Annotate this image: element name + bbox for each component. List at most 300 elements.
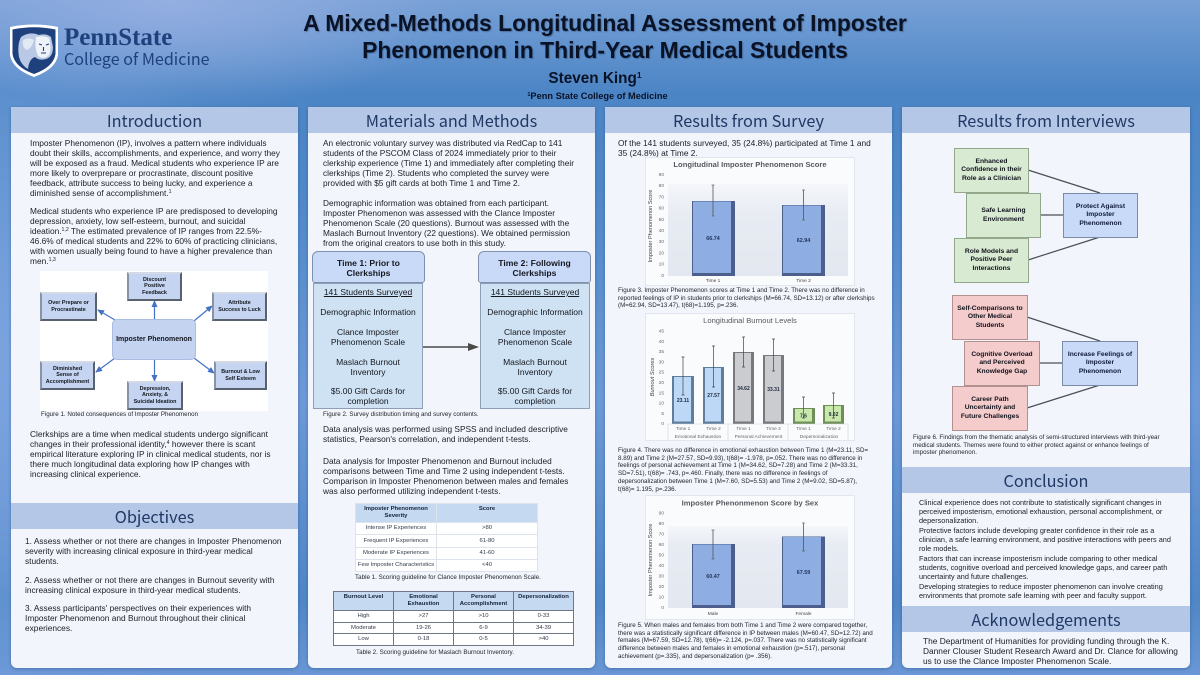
text block: instruments: from the original creators to use both in this study.: [323, 238, 506, 248]
text block: instruments: Phenomenon Scale (20 questions). Burnout was assessed with the: [323, 218, 569, 228]
chart: imposter phenomenon score by sex: Female: [796, 611, 812, 617]
card header: Time 2: Clerkships: [513, 268, 556, 278]
conclusion 1: perceived imposterism, emotional exhaustion, personal accomplishment, or: [919, 507, 1162, 516]
table 1: Clance scoring: 41-60: [479, 550, 495, 556]
text block: clerkships gap: changes in their professional identity,4 however there is scant: [30, 439, 255, 449]
chart: imposter phenomenon score by sex: 10: [659, 594, 664, 600]
caption: figure 5: there was a statistically significant difference in IP between males (M=60.47, SD=12.72) and: [618, 630, 873, 637]
error bars: [682, 337, 835, 418]
diagram: risk themes: [952, 295, 1138, 431]
heading: Materials and Methods: [308, 107, 595, 133]
theme: Role Models: [954, 238, 1029, 283]
theme: Cognitive Overload: [964, 341, 1040, 386]
text block: imposter phenomenon definition: more likely to overprepare or procrastinate, discount positive: [30, 168, 253, 178]
chart: imposter phenomenon score by sex: [645, 495, 855, 620]
card: Time 2 contents: Clance Imposter: [504, 327, 566, 337]
text block: prevalence: men.1,3: [30, 256, 56, 266]
caption: figure 4: depersonalization between Time 1 (M=7.60, SD=5.53) and Time 2 (M=9.02, SD=5.87),: [618, 478, 857, 485]
heading: Results from Interviews: [902, 107, 1190, 133]
caption: figure 4: [618, 447, 868, 493]
bar: Time 1: [692, 185, 735, 276]
chart: longitudinal imposter phenomenon score: 30: [659, 239, 664, 245]
heading: Objectives: [11, 503, 298, 529]
conclusion 1: [919, 498, 1162, 525]
text block: objective 1: [25, 536, 282, 566]
connector lines: [1028, 316, 1100, 408]
text block: acknowledgements: [923, 636, 1178, 666]
text block: clerkships gap: [30, 429, 271, 479]
node: Depression, Anxiety, and Suicidal Ideation: [127, 381, 183, 410]
text block: objective 3: experiences.: [25, 623, 72, 633]
chart: longitudinal burnout levels: [645, 313, 855, 441]
node: Attribute Success to Luck: Attribute: [228, 300, 251, 306]
theme: Cognitive Overload: Knowledge Gap: [977, 368, 1027, 375]
diagram: protective themes: [954, 148, 1138, 283]
table 1: Clance scoring: Severity: [385, 513, 407, 519]
heading: Results from Survey: Results from Survey: [673, 108, 824, 132]
conclusion 3: uncertainty and future challenges.: [919, 572, 1029, 580]
theme: Enhanced Confidence: Role as a Clinician: [962, 175, 1021, 182]
caption: figure 6: Figure 6. Findings from the thematic analysis of semi-structured interviews with third-year: [913, 434, 1160, 441]
text block: instruments: Imposter Phenomenon was assessed with the Clance Imposter: [323, 208, 555, 218]
panel: materials and methods: [308, 107, 595, 668]
card: Time 1 contents: $5.00 Gift Cards for: [331, 386, 405, 396]
heading: Conclusion: Conclusion: [1004, 468, 1088, 492]
card: Time 1 contents: 141 Students Surveyed: [324, 287, 412, 297]
table 2: Maslach scoring: 19-26: [416, 625, 431, 631]
chart: longitudinal imposter phenomenon score: 10: [659, 262, 664, 268]
node: Depression, Anxiety, and Suicidal Ideation: Suicidal Ideation: [134, 399, 176, 405]
outcome: Protect Against Imposter Phenomenon: [1063, 193, 1138, 238]
table 2: Maslach scoring: Depersonalization: [518, 594, 569, 600]
bar: Time 2: [782, 190, 825, 276]
table 2: Maslach scoring: Exhaustion: [408, 601, 439, 607]
text block: imposter phenomenon definition: doubt their skills, accomplishments, and experience, and worry they: [30, 148, 280, 158]
chart: longitudinal burnout levels: 0: [661, 421, 664, 427]
chart: longitudinal burnout levels: 40: [659, 339, 664, 345]
title: [303, 10, 908, 63]
chart: longitudinal imposter phenomenon score: 60: [659, 206, 664, 212]
conclusion 4: [919, 582, 1163, 600]
table 2: Maslach scoring: 0-18: [418, 636, 429, 642]
outcome: Increase Feelings of Imposter Phenomenon: Increase Feelings of: [1068, 351, 1132, 358]
node: Discount Positive Feedback: Positive: [144, 283, 165, 289]
theme: Safe Learning Environment: Safe Learning: [981, 207, 1026, 214]
chart: imposter phenomenon score by sex: 30: [659, 574, 664, 580]
chart: longitudinal burnout levels: 9.02: [829, 412, 839, 418]
caption: figure 4: feelings of personal achievement at Time 1 (M=34.62, SD=7.28) and Time 2 (M=33.31,: [618, 462, 858, 469]
panel: results from survey: [605, 107, 892, 668]
text block: clerkships gap: empirical literature exploring IP in clinical medical students, nor is: [30, 449, 271, 459]
node: Diminished Sense of Accomplishment: Sense of: [56, 372, 79, 378]
chart: longitudinal burnout levels: 30: [659, 359, 664, 365]
bar: Time 2: 62.94: [797, 238, 810, 244]
caption: figure 3: [618, 287, 875, 309]
chart: longitudinal imposter phenomenon score: 90: [659, 172, 664, 178]
heading: Objectives: Objectives: [115, 504, 194, 528]
text block: clerkships gap: there much longitudinal data exploring how IP changes with: [30, 459, 250, 469]
node: Burnout and Low Self Esteem: [214, 361, 267, 390]
heading: Introduction: [11, 107, 298, 133]
chart: longitudinal burnout levels: 5: [661, 411, 664, 417]
heading: Acknowledgements: Acknowledgements: [971, 607, 1121, 631]
chart: imposter phenomenon score by sex: 0: [661, 605, 664, 611]
theme: Role Models: Positive Peer: [970, 256, 1012, 263]
text block: acknowledgements: us to use the Clance Imposter Phenomenon Scale.: [923, 656, 1111, 666]
text block: instruments: Maslach Burnout Inventory (22 questions). We obtained permission: [323, 228, 570, 238]
theme: Role Models: Interactions: [973, 265, 1010, 272]
text block: statistics: [323, 424, 568, 444]
heading: Introduction: Introduction: [107, 108, 202, 132]
text block: survey distribution: clerkships (Time 2). Students who completed the survey were: [323, 168, 549, 178]
caption: figure 5: achievement (p=.335), and depersonalization (p= .356).: [618, 653, 772, 660]
logo wordmark: PennState: PennState: [64, 24, 172, 51]
chart: longitudinal imposter phenomenon score: 20: [659, 250, 664, 256]
node: Diminished Sense of Accomplishment: [40, 361, 95, 390]
chart: longitudinal imposter phenomenon score: 40: [659, 228, 664, 234]
table 2: Maslach scoring: Personal: [471, 594, 496, 600]
node: Burnout and Low Self Esteem: Self Esteem: [225, 376, 256, 382]
card: Time 2 contents: $5.00 Gift Cards for: [498, 386, 572, 396]
text block: survey distribution: [323, 138, 574, 188]
chart: longitudinal imposter phenomenon score: Time 1: [706, 278, 721, 284]
caption: figure 6: medical students. Themes were found to either protect against or enhance feelings of: [913, 442, 1149, 449]
text block: objective 3: Imposter Phenomenon and Burnout throughout their clinical: [25, 613, 245, 623]
conclusion 2: role models.: [919, 544, 959, 553]
figure 1: consequences diagram: [40, 271, 268, 411]
text block: imposter phenomenon definition: will be exposed as a fraud. Medical students who experience IP are: [30, 158, 279, 168]
card: Time 2 contents: completion: [514, 396, 556, 406]
chart: longitudinal burnout levels: Depersonalization: [800, 434, 839, 440]
chart: longitudinal burnout levels: Time 2: [766, 426, 781, 432]
caption: figure 6: [913, 434, 1160, 456]
node: Diminished Sense of Accomplishment: Accomplishment: [46, 379, 89, 385]
heading: Materials and Methods: Materials and Methods: [366, 108, 537, 132]
caption: figure 4: 8.89) and Time 2 (M=27.57, SD=9.93), t(68)= -1.978, p=.052. There was no difference in: [618, 455, 862, 462]
text block: conclusions: [919, 498, 1171, 600]
caption: figure 6: imposter phenomenon.: [913, 449, 977, 456]
card header: Time 1: Time 1: Prior to: [337, 258, 400, 268]
card: Time 1 contents: Clance Imposter: [337, 327, 399, 337]
heading: Conclusion: [902, 467, 1190, 493]
text block: imposter phenomenon definition: diminished sense of accomplishment.1: [30, 188, 172, 198]
chart: longitudinal burnout levels: 25: [659, 370, 664, 376]
chart: longitudinal burnout levels: Time 2: [826, 426, 841, 432]
text block: participation: 35 (24.8%) at Time 2.: [618, 148, 698, 158]
outcome: Increase Feelings of Imposter Phenomenon: Imposter: [1086, 359, 1114, 366]
chart: longitudinal burnout levels: 20: [659, 380, 664, 386]
text block: prevalence: ideation.1,2 The estimated prevalence of IP ranges from 22.5%-: [30, 226, 262, 236]
chart: longitudinal burnout levels: 15: [659, 390, 664, 396]
text block: acknowledgements: Danner Clouser Student Research Award and Dr. Clance for allowing: [923, 646, 1178, 656]
text block: prevalence: [30, 206, 278, 266]
arrow: Time 1 to Time 2: [423, 343, 479, 351]
table 2: Maslach scoring: Burnout Level: [344, 594, 383, 600]
text block: objective 2: increasing clinical exposure in third-year medical students.: [25, 585, 241, 595]
chart: imposter phenomenon score by sex: Male: [708, 611, 719, 617]
text block: comparisons: comparisons between Time and Time 2 using independent t-tests.: [323, 466, 565, 476]
text block: objective 2: [25, 575, 275, 595]
caption: figure 4: t(68)= 1.195, p=.236.: [618, 486, 676, 493]
chart: longitudinal burnout levels: 34.62: [737, 386, 750, 392]
card: Time 1 contents: Demographic Information: [320, 307, 416, 317]
node: Imposter Phenomenon: Imposter Phenomenon: [116, 336, 192, 343]
text block: clerkships gap: increasing clinical experience.: [30, 469, 141, 479]
node: Diminished Sense of Accomplishment: Diminished: [53, 366, 82, 372]
text block: objective 1: 1. Assess whether or not there are changes in Imposter Phenomenon: [25, 536, 282, 546]
conclusion 1: Clinical experience does not contribute to statistically significant changes in: [919, 498, 1162, 507]
node: Over Prepare or Procrastinate: Procrastinate: [51, 306, 86, 312]
theme: Safe Learning Environment: Environment: [983, 216, 1024, 222]
caption: table 2: Table 2. Scoring guideline for Maslach Burnout Inventory.: [356, 649, 514, 656]
text block: comparisons: [323, 456, 568, 496]
chart: longitudinal burnout levels: Time 1: [796, 426, 811, 432]
card: Time 2 contents: 141 Students Surveyed: [491, 287, 579, 297]
card header: Time 1: Clerkships: [347, 268, 390, 278]
theme: Career Path Uncertainty: Uncertainty and: [965, 404, 1015, 411]
theme: Cognitive Overload: and Perceived: [979, 359, 1025, 366]
chart: longitudinal burnout levels: Longitudinal Burnout Levels: [703, 316, 797, 325]
chart: imposter phenomenon score by sex: 40: [659, 563, 664, 569]
chart: longitudinal burnout levels: 35: [659, 349, 664, 355]
table 1: Clance scoring: [355, 503, 538, 572]
chart: longitudinal burnout levels: Time 2: [706, 426, 721, 432]
theme: Enhanced Confidence: Enhanced: [976, 158, 1007, 165]
text block: statistics: Data analysis was performed using SPSS and included descriptive: [323, 424, 568, 434]
node: Imposter Phenomenon: [112, 319, 196, 360]
table 2: Maslach scoring: Emotional: [409, 594, 438, 600]
theme: Self-Comparisons: Self-Comparisons to: [957, 305, 1023, 312]
table 2: Maslach scoring: Accomplishment: [460, 601, 507, 607]
chart: imposter phenomenon score by sex: 60: [659, 542, 664, 548]
theme: Role Models: Role Models and: [965, 248, 1018, 255]
chart: longitudinal burnout levels: Burnout Scores: [650, 358, 656, 396]
axis categories: [668, 424, 848, 440]
table 2: Maslach scoring: >40: [538, 636, 548, 642]
conclusion 3: students, cognitive overload and perceived knowledge gaps, and career path: [919, 562, 1167, 572]
chart: longitudinal imposter phenomenon score: 0: [661, 273, 664, 279]
text block: participation: Of the 141 students surveyed, 35 (24.8%) participated at Time 1 and: [618, 138, 871, 148]
caption: figure 3: Figure 3. Imposter Phenomenon scores at Time 1 and Time 2. There was no difference in: [618, 287, 865, 294]
theme: Career Path Uncertainty: Future Challenges: [961, 413, 1019, 420]
author: Steven King1: [548, 70, 642, 87]
card: Time 1 contents: Maslach Burnout: [336, 357, 400, 367]
table 1: Clance scoring: Moderate IP Experiences: [363, 550, 429, 556]
node: Depression, Anxiety, and Suicidal Ideation: Anxiety, &: [142, 392, 168, 398]
table 1: Clance scoring: Imposter Phenomenon: [364, 506, 428, 512]
conclusion 2: [919, 526, 1171, 553]
chart: longitudinal burnout levels: 7.6: [800, 414, 807, 420]
caption: figure 5: Figure 5. When males and females from both Time 1 and Time 2 were compared together,: [618, 622, 867, 629]
bar: Male: [692, 530, 735, 608]
caption: figure 3: reported feelings of IP in students prior to clerkships (M=66.74, SD=13.12) or after clerkships: [618, 295, 875, 302]
table 2: Maslach scoring: >10: [478, 613, 488, 619]
card: Time 1 contents: [313, 283, 423, 409]
text block: prevalence: Medical students who experience IP are predisposed to developing: [30, 206, 278, 216]
chart: longitudinal burnout levels: 10: [659, 401, 664, 407]
text block: objective 3: [25, 603, 251, 633]
chart: longitudinal imposter phenomenon score: Longitudinal Imposter Phenomenon Score: [673, 160, 827, 169]
node: Attribute Success to Luck: Success to Luck: [218, 306, 261, 312]
text block: comparisons: Data analysis for Imposter Phenomenon and Burnout included: [323, 456, 552, 466]
card: Time 2 contents: [480, 283, 590, 409]
conclusion 2: Protective factors include developing greater confidence in their role as a: [919, 526, 1154, 535]
bar: Time 1: 66.74: [706, 236, 720, 242]
card: Time 2 contents: Maslach Burnout: [503, 357, 567, 367]
node: Depression, Anxiety, and Suicidal Ideation: Depression,: [140, 386, 170, 392]
affiliation: 1Penn State College of Medicine: [527, 91, 668, 101]
caption: figure 4: SD=7.51), t(68)= .743, p=.460. Finally, there was no difference in feelings of: [618, 470, 827, 477]
text block: comparisons: Comparison in Imposter Phenomenon between males and females: [323, 476, 568, 486]
chart: longitudinal imposter phenomenon score: Time 2: [796, 278, 811, 284]
text block: objective 1: severity with increasing clinical exposure in third-year medical: [25, 546, 253, 556]
card: Time 2 contents: Demographic Information: [487, 307, 583, 317]
card: Time 2 contents: Phenomenon Scale: [498, 337, 572, 347]
table 1: Clance scoring: Frequent IP Experiences: [364, 538, 428, 544]
title: A Mixed-Methods Longitudinal Assessment of Imposter: [303, 10, 907, 36]
chart: longitudinal burnout levels: 27.57: [707, 393, 720, 399]
conclusion 3: [919, 554, 1167, 580]
conclusion 4: environments that promote safe learning with peer and faculty support.: [919, 591, 1147, 600]
table 2: Maslach scoring: 34-39: [536, 625, 551, 631]
chart: imposter phenomenon score by sex: Imposter Phenomenon Score: [648, 524, 654, 596]
theme: Self-Comparisons: Other Medical: [968, 313, 1012, 320]
text block: imposter phenomenon definition: [30, 138, 280, 198]
chart: longitudinal burnout levels: Emotional Exhaustion: [675, 434, 722, 440]
table 2: Maslach scoring: Moderate: [351, 625, 376, 631]
card: Time 2 contents: Inventory: [518, 367, 552, 377]
text block: acknowledgements: The Department of Humanities for providing funding through the K.: [923, 636, 1169, 646]
theme: Self-Comparisons: [952, 295, 1028, 340]
chart: longitudinal burnout levels: Personal Achievement: [735, 434, 783, 440]
chart: longitudinal imposter phenomenon score: 80: [659, 183, 664, 189]
conclusion 2: clinician, a safe learning environment, and positive interactions with peers and: [919, 535, 1171, 544]
card: Time 1 contents: completion: [347, 396, 389, 406]
bars: emotional exhaustion: [672, 367, 724, 424]
bar: Female: [782, 523, 825, 608]
logo: Penn State College of Medicine: [10, 24, 210, 77]
table 1: Clance scoring: 61-80: [479, 538, 495, 544]
text block: survey distribution: clerkship experience (Time 1) and immediately after completing their: [323, 158, 574, 168]
table 1: Clance scoring: >80: [482, 525, 492, 531]
text block: imposter phenomenon definition: feedback, attribute success to being lucky, and experience a: [30, 178, 252, 188]
outcome: Protect Against Imposter Phenomenon: Phenomenon: [1079, 220, 1122, 227]
heading: Acknowledgements: [902, 606, 1190, 632]
chart: imposter phenomenon score by sex: 80: [659, 521, 664, 527]
caption: figure 5: females (M=67.59, SD=12.78), t(66)= -2.124, p=.037. There was no statistically significant: [618, 637, 867, 644]
text block: instruments: [323, 198, 570, 248]
node: Discount Positive Feedback: Feedback: [142, 290, 167, 296]
chart: longitudinal imposter phenomenon score: 70: [659, 194, 664, 200]
table 1: Clance scoring: Few Imposter Characteristics: [358, 562, 434, 568]
bar: Male: 60.47: [706, 574, 720, 580]
theme: Safe Learning Environment: [966, 193, 1041, 238]
table 2: Maslach scoring: 0-33: [538, 613, 549, 619]
theme: Enhanced Confidence: [954, 148, 1029, 193]
text block: survey distribution: provided with $5 gift cards at both Time 1 and Time 2.: [323, 178, 520, 188]
text block: survey distribution: An electronic voluntary survey was distributed via RedCap to 141: [323, 138, 562, 148]
conclusion 1: depersonalization.: [919, 516, 978, 525]
caption: figure 5: difference between males and females in emotional exhaustion (p=.517), personal: [618, 645, 845, 652]
caption: figure 5: [618, 622, 873, 660]
theme: Career Path Uncertainty: [952, 386, 1028, 431]
table 1: Clance scoring: Score: [479, 506, 495, 512]
table 2: Maslach scoring: High: [357, 613, 370, 619]
caption: figure 2: Figure 2. Survey distribution timing and survey contents.: [323, 411, 479, 418]
theme: Career Path Uncertainty: Career Path: [971, 396, 1009, 403]
chart: imposter phenomenon score by sex: 90: [659, 510, 664, 516]
bars: depersonalization: [793, 405, 844, 424]
caption: figure 1: Figure 1. Noted consequences of Imposter Phenomenon: [41, 411, 198, 418]
node: Discount Positive Feedback: Discount: [143, 277, 166, 283]
text block: comparisons: was also performed utilizing independent t-tests.: [323, 486, 501, 496]
card: Time 1 contents: Phenomenon Scale: [331, 337, 405, 347]
table 1: Clance scoring: Intense IP Experiences: [366, 525, 426, 531]
title: Phenomenon in Third-Year Medical Students: [362, 37, 848, 63]
text block: instruments: Demographic information was obtained from each participant.: [323, 198, 549, 208]
connector lines: [1029, 170, 1100, 260]
text block: prevalence: with women usually being found to have a higher prevalence than: [30, 246, 272, 256]
caption: figure 3: (M=62.94, SD=13.47), t(68)=1.195, p=.236.: [618, 302, 738, 309]
table 2: Maslach scoring: Low: [358, 636, 369, 642]
text block: prevalence: depression, anxiety, low self-esteem, burnout, and suicidal: [30, 216, 246, 226]
bar: Female: 67.59: [797, 570, 810, 576]
heading: Results from Interviews: Results from Interviews: [957, 108, 1135, 132]
conclusion 4: Developing strategies to reduce imposter phenomenon can involve creating: [919, 582, 1163, 591]
caption: table 1: Table 1. Scoring guideline for Clance Imposter Phenomenon Scale.: [355, 574, 541, 581]
text block: clerkships gap: Clerkships are a time when medical students undergo significant: [30, 429, 268, 439]
panel: introduction and objectives: [11, 107, 298, 668]
outcome: Protect Against Imposter Phenomenon: Imposter: [1086, 211, 1115, 218]
node: Over Prepare or Procrastinate: [40, 292, 97, 321]
chart: imposter phenomenon score by sex: 70: [659, 532, 664, 538]
outcome: Protect Against Imposter Phenomenon: Protect Against: [1076, 203, 1125, 210]
node: Discount Positive Feedback: [127, 272, 182, 301]
card header: Time 2: [478, 251, 591, 283]
chart: longitudinal burnout levels: 23.11: [677, 398, 689, 404]
chart: imposter phenomenon score by sex: 50: [659, 552, 664, 558]
table 2: Maslach scoring: [333, 591, 574, 646]
text block: prevalence: 46.6% of medical students and 22% to 60% of practicing clinicians,: [30, 236, 277, 246]
heading: Results from Survey: [605, 107, 892, 133]
table 1: Clance scoring: <40: [482, 562, 492, 568]
panel: results from interviews, conclusion, acknowledgements: [902, 107, 1190, 668]
theme: Cognitive Overload: Cognitive Overload: [971, 351, 1033, 358]
chart: imposter phenomenon score by sex: 20: [659, 584, 664, 590]
chart: imposter phenomenon score by sex: Imposter Phenonmenon Score by Sex: [682, 498, 819, 508]
chart: longitudinal burnout levels: 33.31: [767, 387, 780, 393]
node: Burnout and Low Self Esteem: Burnout & Low: [221, 369, 260, 375]
chart: longitudinal burnout levels: Time 1: [736, 426, 751, 432]
chart: longitudinal imposter phenomenon score: Imposter Phenomenon Score: [648, 190, 654, 262]
table 2: Maslach scoring: 6-9: [479, 625, 488, 631]
node: Attribute Success to Luck: [212, 292, 267, 321]
conclusion 3: Factors that can increase imposterism include comparing to other medical: [919, 554, 1157, 562]
text block: objective 3: 3. Assess participants' perspectives on their experiences with: [25, 603, 251, 613]
card header: Time 2: Time 2: Following: [498, 258, 571, 268]
text block: objective 1: students.: [25, 556, 59, 566]
text block: participation: [618, 138, 871, 158]
card header: Time 1: [312, 251, 425, 283]
chart: longitudinal burnout levels: Time 1: [676, 426, 691, 432]
arrows from center: [95, 301, 214, 381]
text block: survey distribution: students of the PSCOM Class of 2024 immediately prior to their: [323, 148, 556, 158]
figure 2: survey flow diagram: [312, 251, 591, 409]
chart: longitudinal imposter phenomenon score: [645, 157, 855, 286]
text block: objective 2: 2. Assess whether or not there are changes in Burnout severity with: [25, 575, 275, 585]
icon: Penn State lion shield: [10, 24, 58, 77]
card: Time 1 contents: Inventory: [351, 367, 385, 377]
